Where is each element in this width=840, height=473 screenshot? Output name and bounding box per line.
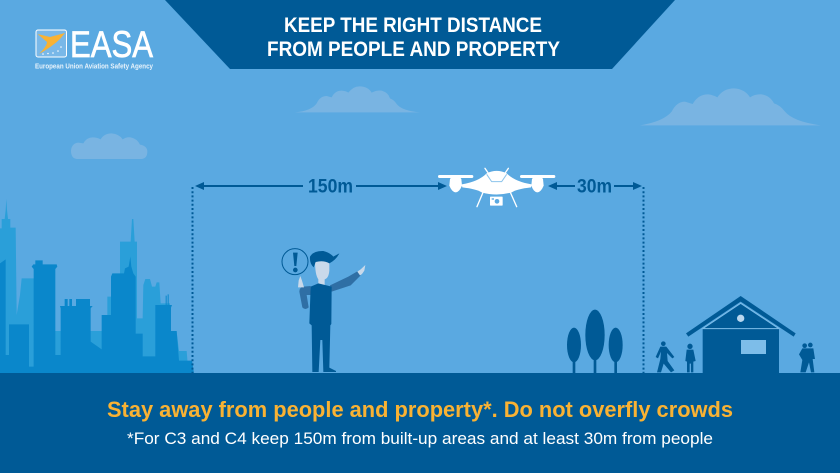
cloud: upper right — [640, 88, 821, 125]
couple — [799, 343, 815, 372]
house — [686, 296, 796, 373]
face and neck — [315, 261, 329, 285]
title banner: FROM PEOPLE AND PROPERTY — [267, 38, 560, 61]
pointing hand — [357, 265, 365, 275]
dotted line: 150m boundary — [192, 187, 194, 373]
EASA logo: EASA — [70, 24, 153, 65]
torso and legs — [309, 283, 336, 372]
title banner: KEEP THE RIGHT DISTANCE — [284, 14, 542, 37]
warning icon — [282, 249, 308, 275]
city skyline — [0, 199, 194, 373]
distance arrow: 30m: 30m — [577, 176, 612, 198]
cloud: upper centre — [295, 86, 420, 112]
cloud: left — [71, 133, 147, 159]
dark foreground buildings — [0, 257, 194, 373]
hair — [310, 251, 339, 267]
left arm — [299, 286, 311, 309]
EASA logo: European Union Aviation Safety Agency — [35, 64, 153, 70]
ground band — [0, 373, 840, 473]
distance arrow: 150m: 150m — [308, 176, 353, 198]
left hand — [298, 276, 304, 287]
footnote: *For C3 and C4 keep 150m from built-up areas and at least 30m from people — [127, 429, 713, 448]
EASA logo — [35, 24, 153, 70]
dotted line: 30m boundary — [642, 187, 644, 373]
raised arm pointing — [330, 271, 361, 292]
light background buildings — [0, 199, 188, 372]
title banner — [165, 0, 675, 69]
main message: Stay away from people and property*. Do not overfly crowds — [107, 397, 733, 422]
trees — [567, 310, 623, 373]
people near house — [656, 341, 815, 372]
figure: person pointing at drone — [282, 249, 365, 372]
icon: drone — [438, 168, 555, 207]
person walking — [656, 341, 674, 372]
distance arrow: 30m — [548, 176, 642, 198]
distance arrow: 150m — [195, 176, 447, 198]
person standing — [685, 344, 696, 372]
